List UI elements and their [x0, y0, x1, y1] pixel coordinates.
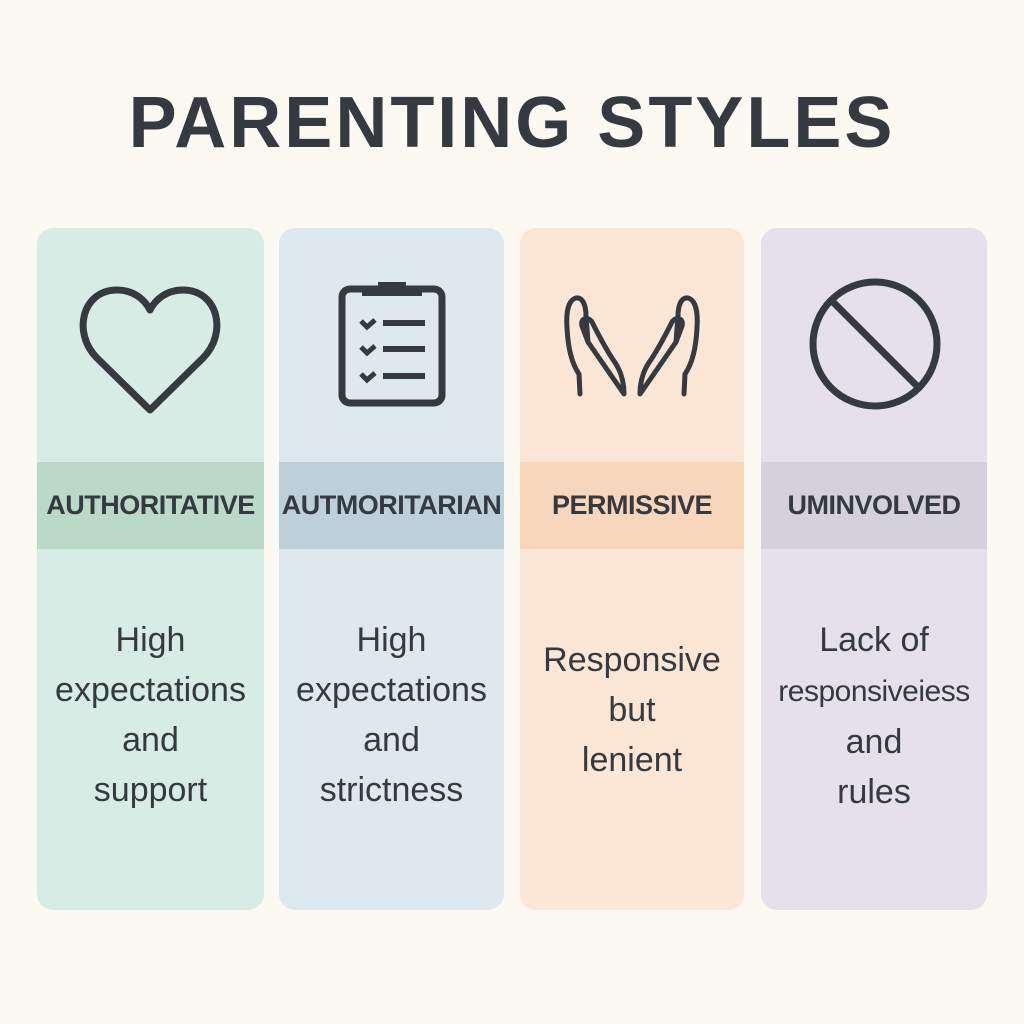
label: [37, 462, 264, 549]
label: [761, 462, 987, 549]
label: [520, 462, 744, 549]
description: rules: [837, 773, 911, 811]
description: strictness: [320, 771, 463, 809]
icon: hands: [564, 295, 700, 396]
label: PERMISSIVE: [552, 490, 712, 520]
description: lenient: [582, 741, 682, 779]
description: expectations: [296, 671, 487, 709]
description: support: [94, 771, 207, 809]
description: [778, 621, 970, 811]
panel: authoritarian: [279, 228, 504, 910]
description: and: [363, 721, 420, 759]
description: High: [357, 621, 426, 659]
description: responsiveiess: [778, 675, 970, 708]
panel: uninvolved: [761, 228, 987, 910]
description: and: [122, 721, 179, 759]
description: expectations: [55, 671, 246, 709]
description: Responsive: [543, 641, 721, 679]
label: [279, 462, 504, 549]
description: [296, 621, 487, 809]
description: Lack of: [819, 621, 929, 659]
description: and: [846, 723, 902, 761]
label: UMINVOLVED: [787, 490, 960, 520]
description: High: [116, 621, 185, 659]
panel: permissive: [520, 228, 744, 910]
title: PARENTING STYLES: [129, 83, 895, 163]
label: AUTMORITARIAN: [282, 490, 501, 520]
description: [55, 621, 246, 809]
panel: authoritative: [37, 228, 264, 910]
icon: prohibited: [810, 278, 940, 410]
description: [543, 641, 721, 779]
description: but: [608, 691, 656, 729]
icon: heart: [80, 286, 220, 414]
icon: clipboard: [338, 282, 446, 406]
label: AUTHORITATIVE: [46, 490, 255, 520]
